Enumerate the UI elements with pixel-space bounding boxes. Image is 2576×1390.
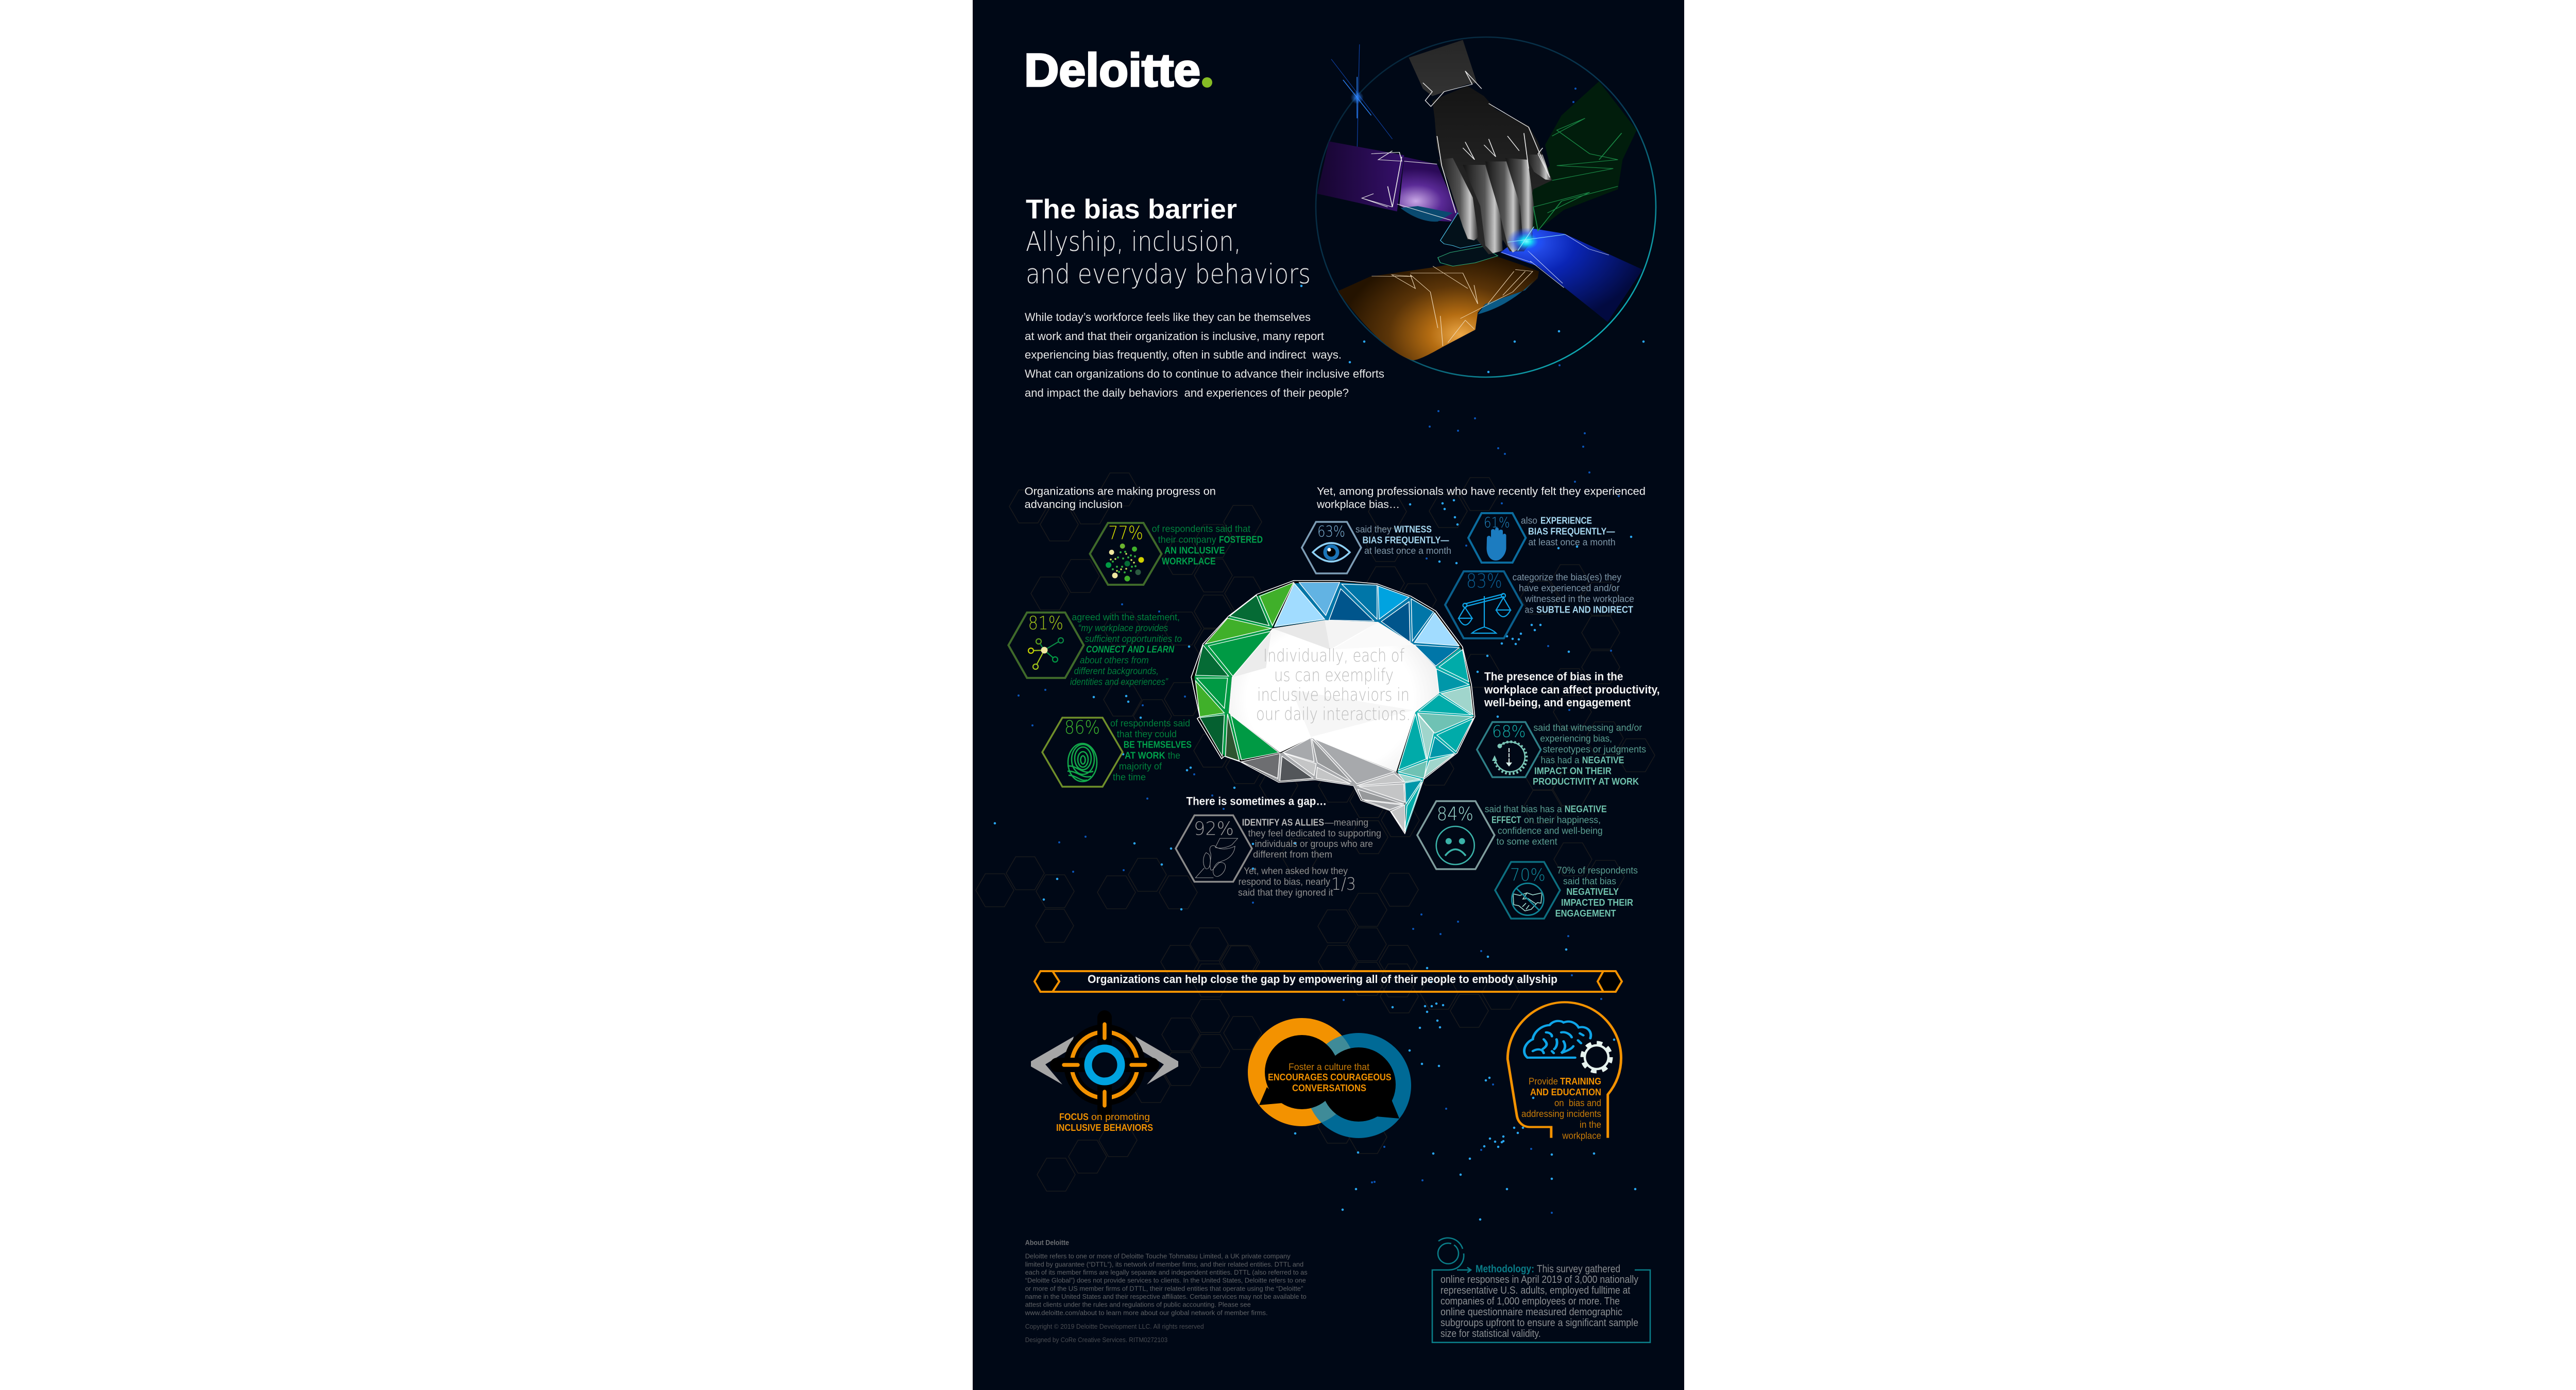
- intro text block: and impact the daily behaviors and experiences of their people?: [1025, 386, 1349, 399]
- intro text block: at work and that their organization is inclusive, many report: [1025, 330, 1324, 343]
- description: [1521, 516, 1616, 548]
- description: have experienced and/or: [1519, 583, 1620, 594]
- description: about others from: [1080, 655, 1149, 665]
- description: [1238, 817, 1381, 897]
- hexagon: [1008, 613, 1083, 678]
- methodology text: online responses in April 2019 of 3,000 nationally: [1440, 1274, 1638, 1285]
- stat: 68%: [1477, 722, 1646, 787]
- caption: on promoting: [1091, 1112, 1150, 1122]
- description: EFFECT: [1492, 815, 1521, 825]
- description: [1555, 866, 1638, 919]
- description: also: [1521, 516, 1537, 526]
- description: said that they ignored it: [1238, 887, 1333, 897]
- brain outline: [1191, 581, 1475, 834]
- green wireframe lines: [1533, 118, 1622, 231]
- description: as: [1525, 604, 1533, 615]
- icon: target eye: [1031, 1018, 1178, 1112]
- number: 81%: [1028, 613, 1063, 634]
- caption: [1521, 1076, 1601, 1141]
- background hexagon grid: [976, 473, 1655, 1191]
- description: said that witnessing and/or: [1533, 723, 1642, 733]
- caption: CONVERSATIONS: [1292, 1083, 1366, 1093]
- description: of respondents said that: [1152, 524, 1250, 534]
- caption: AND EDUCATION: [1530, 1087, 1601, 1097]
- description: “my workplace provides: [1078, 623, 1168, 633]
- stat: 81%: [1008, 612, 1182, 687]
- description: on their happiness,: [1524, 815, 1601, 825]
- description: said that bias has a: [1485, 804, 1563, 815]
- action: focus on inclusive behaviors: [1031, 1018, 1178, 1133]
- description: BE THEMSELVES: [1124, 740, 1192, 750]
- hexagon: [1302, 522, 1361, 573]
- icon: raised hand: [1487, 528, 1506, 561]
- message text: inclusive behaviors in: [1257, 685, 1410, 705]
- description: [1355, 524, 1451, 556]
- stat: 63%: [1302, 522, 1451, 573]
- description: WITNESS: [1394, 524, 1432, 534]
- message text: Individually, each of: [1263, 646, 1404, 666]
- description: NEGATIVE: [1582, 755, 1624, 765]
- heading: workplace bias: [1316, 486, 1646, 511]
- orange arm: [1338, 206, 1539, 360]
- description: —meaning: [1325, 817, 1368, 827]
- methodology text: size for statistical validity.: [1440, 1328, 1541, 1340]
- description: at least once a month: [1364, 546, 1451, 556]
- number: 68%: [1492, 723, 1526, 741]
- action: courageous conversations: [1248, 1018, 1411, 1138]
- description: that they could: [1117, 729, 1177, 739]
- caption: on bias and: [1554, 1098, 1601, 1108]
- stat: 70%: [1495, 862, 1638, 919]
- description: respond to bias, nearly: [1239, 876, 1330, 887]
- footer: about Deloitte: name in the United States and their respective affiliates. Certain services may not be available to: [1025, 1293, 1307, 1300]
- icon: eye: [1313, 543, 1350, 562]
- description: stereotypes or judgments: [1543, 744, 1646, 755]
- icon: gear: [1582, 1043, 1611, 1072]
- description: [1485, 804, 1607, 847]
- regional underlays: [1194, 582, 1473, 832]
- caption: Foster a culture that: [1289, 1062, 1369, 1072]
- number: 84%: [1437, 804, 1473, 825]
- description: has had a: [1540, 755, 1580, 765]
- icon: sad face: [1436, 826, 1475, 864]
- description: the time: [1113, 772, 1146, 783]
- description: BIAS FREQUENTLY—: [1528, 527, 1615, 537]
- caption: [1056, 1112, 1153, 1133]
- description: different backgrounds,: [1074, 666, 1159, 676]
- dark background panel: [973, 0, 1684, 1390]
- description: FOSTERED: [1219, 535, 1263, 545]
- banner: [1035, 971, 1622, 992]
- description: agreed with the statement,: [1072, 612, 1180, 622]
- footer: about Deloitte: “Deloitte Global”) does not provide services to clients. In the United States, Deloitte refers to one: [1025, 1277, 1306, 1284]
- orange wireframe lines: [1371, 266, 1533, 346]
- caption: [1268, 1062, 1392, 1093]
- hexagon: [1468, 513, 1526, 563]
- description: Yet, when asked how they: [1244, 866, 1348, 876]
- footer: about Deloitte: www.deloitte.com/about to learn more about our global network of member firms.: [1025, 1309, 1268, 1316]
- footer: about Deloitte: Copyright © 2019 Deloitte Development LLC. All rights reserved: [1025, 1323, 1204, 1330]
- white wireframe lines: [1362, 71, 1550, 221]
- icon: head outline: [1507, 1002, 1621, 1138]
- description: SUBTLE AND INDIRECT: [1536, 604, 1633, 615]
- footer: about Deloitte: Designed by CoRe Creative Services. RITM0272103: [1025, 1336, 1167, 1344]
- icon: handshake crossed out: [1512, 883, 1544, 915]
- hexagon: [1477, 722, 1541, 777]
- icon: fingerprint: [1067, 743, 1097, 782]
- caption: FOCUS: [1059, 1112, 1089, 1122]
- description: experiencing bias,: [1540, 734, 1612, 744]
- heading: workplace bias: Yet, among professionals who have recently felt they experienced: [1317, 486, 1646, 498]
- description: categorize the bias(es) they: [1513, 572, 1621, 583]
- number: 86%: [1064, 717, 1100, 738]
- heading: workplace bias: workplace bias…: [1316, 499, 1400, 511]
- icon: brain: [1524, 1021, 1591, 1058]
- heading: progress: advancing inclusion: [1025, 499, 1123, 511]
- intro text block: What can organizations do to continue to advance their inclusive efforts: [1025, 367, 1384, 380]
- action: training and education: [1507, 1002, 1621, 1141]
- intro text block: experiencing bias frequently, often in subtle and indirect ways.: [1025, 348, 1342, 361]
- icon: cycle with box frame: [1432, 1238, 1650, 1343]
- centre glow: [1506, 227, 1565, 255]
- white core: [1229, 620, 1439, 772]
- message text: [1256, 646, 1411, 724]
- description: [1152, 524, 1263, 566]
- intro text block: [1025, 311, 1384, 399]
- heading: gap: There is sometimes a gap…: [1186, 795, 1327, 808]
- hexagon: [1176, 815, 1252, 882]
- hexagon: [1445, 571, 1522, 638]
- description: majority of: [1119, 761, 1162, 772]
- description: CONNECT AND LEARN: [1086, 645, 1175, 655]
- title: The bias barrier: [1026, 194, 1237, 225]
- stat: 92%: [1176, 815, 1381, 897]
- description: [1513, 572, 1634, 615]
- stat: 86%: [1042, 717, 1192, 787]
- heading: presence of bias: well-being, and engagement: [1484, 696, 1631, 709]
- caption: addressing incidents: [1521, 1109, 1601, 1119]
- description: 70% of respondents: [1557, 866, 1638, 876]
- colored facets: [1195, 582, 1473, 832]
- footer: about Deloitte: attest clients under the rules and regulations of public accounting. Please see: [1025, 1301, 1251, 1309]
- description: sufficient opportunities to: [1085, 634, 1182, 644]
- stat: 77%: [1090, 523, 1263, 585]
- blue arm: [1500, 228, 1642, 322]
- description: EXPERIENCE: [1540, 516, 1592, 526]
- description: WORKPLACE: [1162, 556, 1216, 566]
- methodology text: representative U.S. adults, employed fulltime at: [1440, 1285, 1631, 1296]
- icon: speech bubbles: [1248, 1018, 1411, 1138]
- caption: in the: [1580, 1120, 1601, 1130]
- number: 83%: [1466, 570, 1502, 592]
- footer: about Deloitte: each of its member firms are legally separate and independent entities. DTTL (also referred to as: [1025, 1268, 1308, 1276]
- description: IDENTIFY AS ALLIES: [1242, 817, 1324, 827]
- stat: 84%: [1417, 801, 1607, 869]
- description: 1/3: [1331, 874, 1356, 894]
- icon: helping hands: [1195, 838, 1238, 878]
- description: to some extent: [1497, 837, 1557, 847]
- message text: our daily interactions.: [1256, 704, 1411, 724]
- brain: low-poly mosaic with message: [1191, 581, 1475, 834]
- dark hand and cuff: [1409, 40, 1477, 96]
- description: at least once a month: [1528, 537, 1616, 548]
- title: [1026, 194, 1311, 290]
- hexagon: [1090, 523, 1161, 585]
- intro text block: While today’s workforce feels like they can be themselves: [1025, 311, 1311, 324]
- description: said they: [1355, 524, 1392, 534]
- description: BIAS FREQUENTLY—: [1362, 535, 1449, 545]
- description: PRODUCTIVITY AT WORK: [1533, 776, 1639, 787]
- blue star lines: [1331, 44, 1393, 151]
- description: IMPACTED THEIR: [1561, 897, 1633, 908]
- heading: presence of bias: workplace can affect productivity,: [1484, 683, 1660, 696]
- banner frame: [1035, 971, 1622, 992]
- description: [1070, 612, 1182, 687]
- icon: scales: [1459, 594, 1511, 633]
- footer: about Deloitte: limited by guarantee (“DTTL”), its network of member firms, and their related entities. DTTL and: [1025, 1260, 1303, 1268]
- hexagon: [1417, 801, 1495, 869]
- number: 77%: [1108, 523, 1143, 544]
- description: said that bias: [1563, 876, 1616, 887]
- methodology text: companies of 1,000 employees or more. The: [1440, 1296, 1620, 1307]
- green arm: [1529, 81, 1637, 233]
- description: [1110, 718, 1192, 783]
- methodology text: This survey gathered: [1537, 1263, 1620, 1275]
- methodology text: subgroups upfront to ensure a significant sample: [1440, 1317, 1638, 1329]
- hexagon: [1495, 862, 1560, 919]
- circle outline: [1316, 37, 1656, 377]
- heading: presence of bias: The presence of bias in the: [1484, 670, 1623, 683]
- number: 61%: [1484, 514, 1510, 531]
- footer: about Deloitte: Deloitte refers to one or more of Deloitte Touche Tohmatsu Limited, a UK private company: [1025, 1252, 1291, 1260]
- purple arm: [1317, 141, 1458, 222]
- icon: network: [1028, 638, 1063, 669]
- heading: progress: Organizations are making progress on: [1025, 486, 1216, 498]
- caption: Provide: [1529, 1076, 1558, 1087]
- white lines on blue arm: [1501, 234, 1609, 287]
- description: different from them: [1253, 850, 1332, 860]
- description: their company: [1158, 535, 1216, 545]
- caption: workplace: [1562, 1130, 1601, 1141]
- description: AN INCLUSIVE: [1164, 545, 1225, 555]
- footer: about Deloitte: About Deloitte: [1025, 1239, 1069, 1247]
- illustration: joined hands in a circle: [1316, 37, 1656, 377]
- fingers: [1438, 155, 1551, 253]
- description: witnessed in the workplace: [1524, 594, 1634, 604]
- number: 70%: [1510, 864, 1546, 885]
- logo: Deloitte: Deloitte: [1024, 45, 1200, 96]
- description: IMPACT ON THEIR: [1534, 766, 1612, 776]
- methodology text: Methodology:: [1476, 1263, 1534, 1275]
- caption: ENCOURAGES COURAGEOUS: [1268, 1072, 1392, 1082]
- message text: us can exemplify: [1274, 665, 1394, 686]
- lower cyan hand: [1438, 213, 1498, 266]
- description: identities and experiences”: [1070, 676, 1168, 687]
- methodology text: [1440, 1263, 1638, 1340]
- banner text: Organizations can help close the gap by empowering all of their people to embody allyship: [1088, 973, 1557, 986]
- description: the: [1168, 751, 1180, 761]
- description: confidence and well-being: [1498, 826, 1603, 836]
- number: 92%: [1194, 819, 1234, 840]
- methodology text: online questionnaire measured demographic: [1440, 1307, 1622, 1318]
- description: [1533, 723, 1646, 787]
- icon: dots cluster: [1106, 544, 1144, 581]
- number: 63%: [1317, 523, 1345, 540]
- title: Allyship, inclusion,: [1026, 226, 1241, 258]
- callout: methodology: [1432, 1238, 1650, 1343]
- footer: about Deloitte: or more of the US member firms of DTTL, their related entities that operate using the “Deloitte”: [1025, 1284, 1303, 1292]
- heading: progress: [1025, 486, 1216, 511]
- caption: TRAINING: [1560, 1076, 1601, 1087]
- footer: about Deloitte: [1025, 1239, 1308, 1344]
- description: ENGAGEMENT: [1555, 908, 1616, 919]
- heading: presence of bias: [1484, 670, 1660, 709]
- icon: gear arrow down: [1492, 742, 1527, 774]
- description: AT WORK: [1125, 751, 1165, 761]
- star field dots: [995, 89, 1643, 1219]
- description: individuals or groups who are: [1255, 839, 1373, 849]
- caption: INCLUSIVE BEHAVIORS: [1056, 1123, 1153, 1133]
- stat: 83%: [1445, 570, 1634, 638]
- description: they feel dedicated to supporting: [1248, 828, 1381, 838]
- description: of respondents said: [1110, 718, 1190, 728]
- hexagon: [1042, 718, 1123, 787]
- description: NEGATIVELY: [1566, 887, 1619, 897]
- description: NEGATIVE: [1565, 804, 1607, 815]
- title: and everyday behaviors: [1026, 259, 1311, 290]
- stat: 61%: [1468, 513, 1616, 563]
